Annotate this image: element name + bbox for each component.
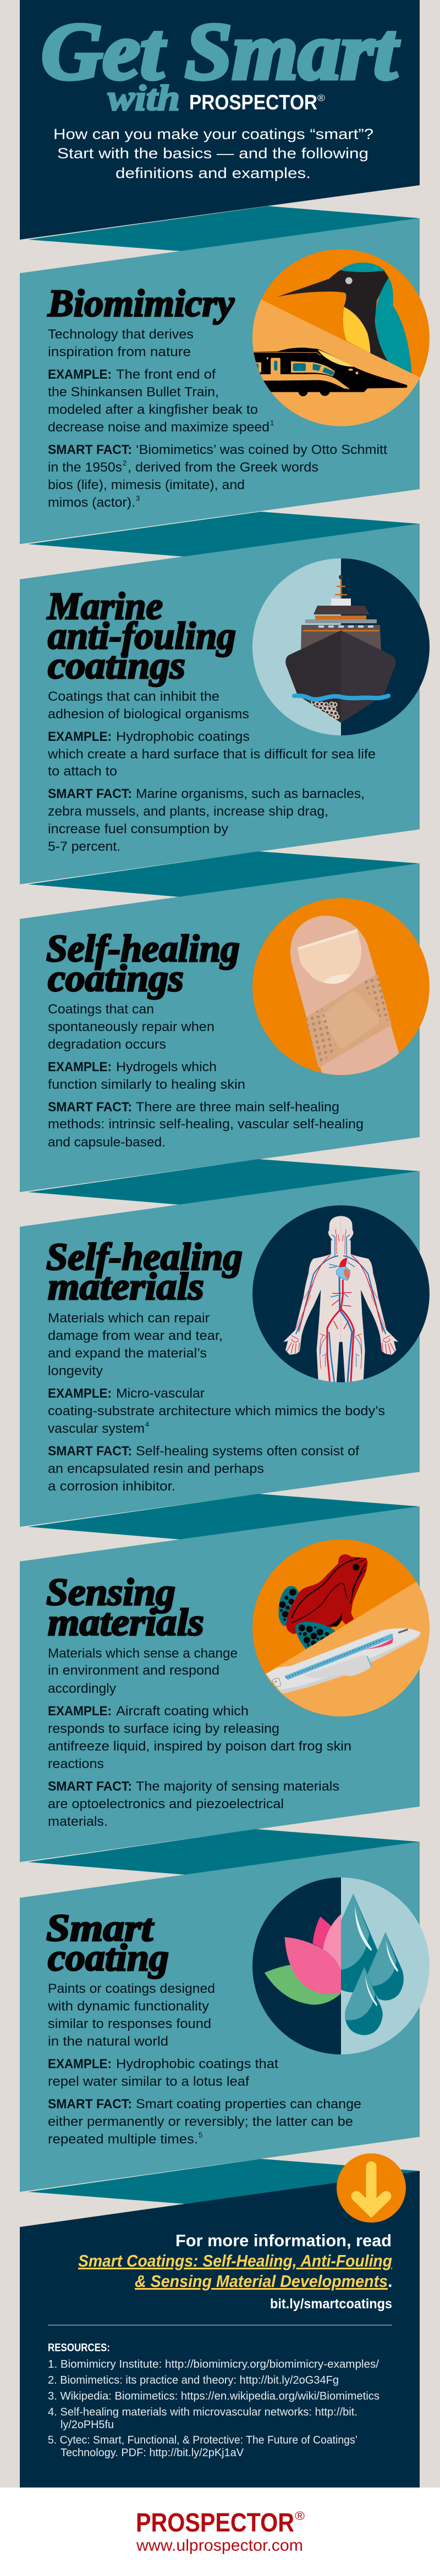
- heading: [47, 585, 236, 687]
- smart fact: either permanently or reversibly; the latter can be: [48, 2114, 353, 2129]
- example: EXAMPLE:: [48, 2057, 112, 2071]
- example: 4: [145, 1420, 149, 1428]
- subtitle: ®: [317, 93, 326, 103]
- example: decrease noise and maximize speed: [48, 420, 270, 435]
- example: EXAMPLE:: [48, 1704, 112, 1719]
- intro text: definitions and examples.: [116, 165, 311, 181]
- smart fact: repeated multiple times.: [48, 2132, 198, 2147]
- icon: bullet train: [254, 348, 408, 396]
- heading: coatings: [48, 957, 184, 1000]
- footer logo: [0, 2488, 440, 2576]
- resources list: [48, 2342, 380, 2459]
- smart fact: 2: [123, 459, 127, 467]
- smart fact: SMART FACT:: [48, 1444, 132, 1459]
- example: Hydrophobic coatings: [116, 729, 250, 744]
- icon: aircraft: [266, 1628, 421, 1693]
- smart fact: SMART FACT:: [48, 786, 132, 801]
- resources list: 3. Wikipedia: Biomimetics: https://en.wikipedia.org/wiki/Biomimetics: [48, 2390, 380, 2402]
- example: coating-substrate architecture which mimics the body’s: [48, 1404, 385, 1419]
- example: responds to surface icing by releasing: [48, 1721, 279, 1736]
- heading: materials: [48, 1602, 204, 1644]
- example: vascular system: [48, 1421, 145, 1436]
- intro text: Start with the basics — and the following: [57, 145, 369, 162]
- ribbon fold 6: [28, 1829, 420, 1875]
- call to action: [78, 2231, 393, 2312]
- ribbon fold 2: [28, 512, 420, 557]
- smart fact: an encapsulated resin and perhaps: [48, 1461, 264, 1476]
- example: function similarly to healing skin: [48, 1077, 245, 1092]
- panel: biomimicry: [20, 218, 433, 544]
- example: Hydrogels which: [116, 1060, 217, 1074]
- smart fact: , derived from the Greek words: [128, 460, 318, 475]
- example: EXAMPLE:: [48, 729, 112, 744]
- illustration: lotus and water droplets: [252, 1877, 430, 2054]
- smart fact: [48, 1444, 359, 1494]
- example: repel water similar to a lotus leaf: [48, 2074, 249, 2089]
- definition: Materials which can repair: [48, 1311, 210, 1326]
- illustration: bandaged finger: [252, 898, 430, 1083]
- example: [48, 1060, 245, 1092]
- intro text: How can you make your coatings “smart”?: [53, 126, 373, 142]
- smart fact: [48, 442, 387, 510]
- example: Aircraft coating which: [116, 1704, 249, 1719]
- heading: Marine: [47, 585, 163, 628]
- example: EXAMPLE:: [48, 1060, 112, 1074]
- example: which create a hard surface that is difficult for sea life: [47, 747, 376, 762]
- definition: accordingly: [48, 1681, 116, 1696]
- icon: kingfisher: [277, 263, 411, 373]
- smart fact: increase fuel consumption by: [48, 822, 228, 836]
- call to action: .: [388, 2272, 393, 2291]
- definition: Technology that derives: [48, 327, 194, 342]
- smart fact: Self-healing systems often consist of: [136, 1444, 359, 1459]
- panel: self-healing materials: [20, 1171, 430, 1527]
- definition: inspiration from nature: [48, 345, 191, 359]
- smart fact: [48, 1100, 364, 1150]
- example: [48, 1704, 351, 1771]
- smart fact: SMART FACT:: [48, 1779, 132, 1794]
- example: [48, 2057, 278, 2089]
- definition: [48, 327, 194, 359]
- heading: Self-healing: [46, 1236, 243, 1278]
- footer logo: www.ulprospector.com: [136, 2536, 303, 2555]
- resources list: Technology. PDF: http://bit.ly/2pKj1aV: [61, 2447, 244, 2459]
- panel: marine anti-fouling coatings: [20, 524, 430, 884]
- example: Micro-vascular: [116, 1386, 205, 1401]
- intro text: [53, 126, 373, 181]
- definition: and expand the material’s: [48, 1346, 207, 1361]
- heading: [46, 1571, 204, 1644]
- panel: more information and resources: [20, 2171, 420, 2488]
- smart fact: in the 1950s: [48, 460, 122, 475]
- resources list: ly/2oPH5fu: [61, 2419, 114, 2431]
- smart fact: zebra mussels, and plants, increase ship drag,: [48, 804, 328, 819]
- heading: Smart: [46, 1907, 155, 1949]
- smart fact: mimos (actor).: [48, 495, 135, 510]
- example: the Shinkansen Bullet Train,: [48, 385, 219, 400]
- smart fact: and capsule-based.: [48, 1135, 166, 1150]
- subtitle: PROSPECTOR: [189, 91, 317, 114]
- subtitle: [108, 78, 326, 118]
- icon: lotus: [265, 1914, 341, 2005]
- resources list: RESOURCES:: [48, 2342, 110, 2354]
- icon: water droplets: [341, 1893, 404, 2035]
- example: Hydrophobic coatings that: [116, 2057, 278, 2071]
- resources list: 5. Cytec: Smart, Functional, & Protective: The Future of Coatings’: [48, 2434, 358, 2446]
- definition: with dynamic functionality: [47, 1999, 209, 2014]
- smart fact: Smart coating properties can change: [136, 2097, 361, 2112]
- definition: Coatings that can: [48, 1002, 154, 1017]
- definition: [47, 1981, 215, 2049]
- heading: Biomimicry: [47, 282, 235, 325]
- definition: Materials which sense a change: [48, 1646, 238, 1661]
- heading: Self-healing: [46, 928, 240, 970]
- smart fact: bios (life), mimesis (imitate), and: [48, 478, 245, 492]
- example: to attach to: [48, 764, 117, 779]
- smart fact: There are three main self-healing: [136, 1100, 339, 1115]
- smart fact: SMART FACT:: [48, 1100, 132, 1115]
- illustration: vascular system: [252, 1205, 430, 1384]
- definition: degradation occurs: [48, 1037, 166, 1052]
- footer logo: PROSPECTOR: [136, 2508, 294, 2538]
- smart fact: [48, 2097, 361, 2147]
- ribbon fold 3: [28, 851, 420, 897]
- heading: coating: [48, 1937, 169, 1979]
- call to action: bit.ly/smartcoatings: [270, 2296, 392, 2312]
- smart fact: ‘Biomimetics’ was coined by Otto Schmitt: [136, 442, 387, 457]
- footer logo: ®: [295, 2509, 305, 2523]
- resources list: 1. Biomimicry Institute: http://biomimicry.org/biomimicry-examples/: [48, 2358, 379, 2370]
- resources list: 4. Self-healing materials with microvascular networks: http://bit.: [48, 2406, 358, 2418]
- subtitle: with: [108, 78, 180, 118]
- panel: self-healing coatings: [20, 863, 430, 1192]
- smart fact: materials.: [48, 1814, 108, 1829]
- example: modeled after a kingfisher beak to: [48, 402, 258, 417]
- smart fact: a corrosion inhibitor.: [48, 1479, 175, 1494]
- arrow badge: [337, 2153, 406, 2223]
- heading: [46, 928, 240, 1000]
- call to action: & Sensing Material Developments: [135, 2272, 388, 2291]
- illustration: kingfisher and bullet train: [250, 250, 433, 430]
- smart fact: are optoelectronics and piezoelectrical: [48, 1797, 284, 1811]
- ribbon fold 4: [28, 1159, 420, 1205]
- smart fact: 3: [136, 494, 140, 502]
- definition: similar to responses found: [48, 2017, 211, 2031]
- ribbon fold 1: [28, 206, 420, 251]
- example: [48, 1386, 385, 1436]
- example: reactions: [48, 1757, 104, 1771]
- definition: Coatings that can inhibit the: [48, 689, 219, 704]
- smart fact: 5: [199, 2131, 202, 2139]
- call to action: For more information, read: [175, 2231, 392, 2250]
- example: [47, 729, 376, 779]
- smart fact: The majority of sensing materials: [136, 1779, 339, 1794]
- example: [48, 367, 274, 435]
- ribbon fold 7: [28, 2159, 420, 2204]
- example: EXAMPLE:: [48, 367, 112, 382]
- icon: poison dart frog: [279, 1554, 367, 1649]
- definition: in environment and respond: [48, 1663, 219, 1678]
- smart fact: Marine organisms, such as barnacles,: [136, 786, 365, 801]
- heading: materials: [48, 1266, 204, 1308]
- definition: spontaneously repair when: [48, 1020, 215, 1034]
- example: The front end of: [116, 367, 216, 382]
- smart fact: [48, 786, 365, 854]
- resources list: 2. Biomimetics: its practice and theory: http://bit.ly/2oG34Fg: [48, 2374, 339, 2386]
- title: Get Smart: [41, 7, 399, 97]
- example: EXAMPLE:: [48, 1386, 112, 1401]
- ribbon fold 5: [28, 1494, 420, 1539]
- definition: damage from wear and tear,: [48, 1328, 223, 1343]
- definition: longevity: [48, 1364, 103, 1378]
- smart fact: 5-7 percent.: [48, 839, 120, 854]
- smart fact: SMART FACT:: [48, 442, 132, 457]
- heading: anti-fouling: [48, 615, 236, 657]
- definition: adhesion of biological organisms: [48, 707, 249, 722]
- definition: [48, 1002, 215, 1052]
- smart fact: SMART FACT:: [48, 2097, 132, 2112]
- heading: Sensing: [46, 1571, 175, 1614]
- definition: [48, 1646, 238, 1696]
- heading: [46, 1907, 169, 1979]
- definition: [48, 1311, 223, 1378]
- heading: [46, 1236, 243, 1308]
- panel: sensing materials: [20, 1506, 433, 1862]
- illustration: poison dart frog and aircraft: [250, 1539, 433, 1721]
- panel: smart coating: [20, 1842, 430, 2192]
- smart fact: [48, 1779, 339, 1829]
- definition: [48, 689, 249, 722]
- heading: coatings: [48, 645, 185, 687]
- call to action: Smart Coatings: Self-Healing, Anti-Fouling: [78, 2251, 392, 2270]
- header panel: [20, 0, 420, 240]
- example: antifreeze liquid, inspired by poison dart frog skin: [48, 1739, 351, 1754]
- illustration: ship: [252, 558, 430, 735]
- smart fact: methods: intrinsic self-healing, vascular self-healing: [48, 1117, 364, 1132]
- definition: Paints or coatings designed: [48, 1981, 215, 1996]
- example: 1: [270, 419, 274, 427]
- definition: in the natural world: [48, 2034, 168, 2049]
